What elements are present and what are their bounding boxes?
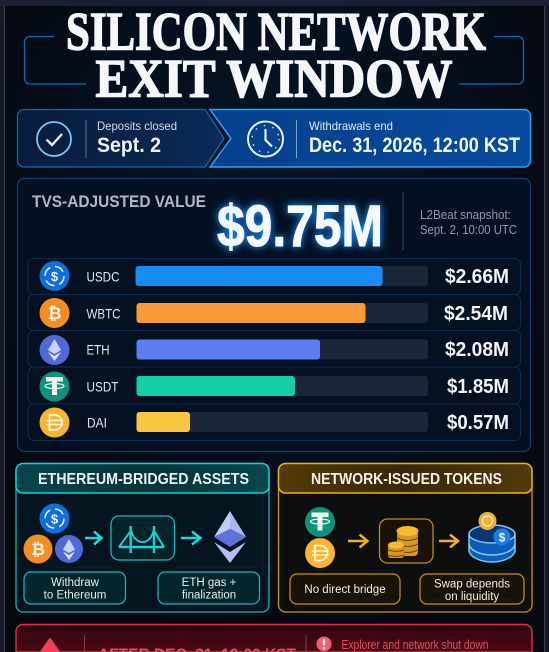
heading: Ethereum-bridged assets <box>16 464 269 493</box>
heading: network-issued tokens <box>278 464 532 493</box>
row: USDC <box>28 258 520 294</box>
big number: $9.75M <box>217 194 383 259</box>
row: ETH: ETH <box>86 342 110 358</box>
label: withdraw to Ethereum: Withdraw <box>51 577 100 589</box>
label: withdraw to Ethereum <box>24 572 126 604</box>
label: ETH gas + finalization: finalization <box>182 590 236 602</box>
icon: WBTC <box>40 298 70 328</box>
label: no direct bridge <box>290 574 400 604</box>
panel: network-issued tokens <box>278 464 532 612</box>
panel: after deadline warning <box>16 624 532 652</box>
label: swap depends on liquidity: Swap depends <box>434 578 510 590</box>
panel: Ethereum-bridged assets <box>16 464 269 612</box>
row: DAI <box>28 404 520 440</box>
title <box>66 2 486 108</box>
icon: alert circle <box>316 636 332 652</box>
label: swap depends on liquidity <box>420 574 524 604</box>
label: withdraw to Ethereum: to Ethereum <box>44 590 106 602</box>
icon: USDC coin: $ <box>51 512 59 526</box>
row: USDC: $2.66M <box>445 265 509 288</box>
row: ETH: $2.08M <box>445 338 509 361</box>
row: DAI: DAI <box>87 414 107 430</box>
text: snapshot note: L2Beat snapshot: <box>420 208 511 222</box>
title: EXIT WINDOW <box>96 48 452 108</box>
heading: network-issued tokens: NETWORK-ISSUED TOKENS <box>311 471 502 488</box>
row: WBTC <box>28 294 520 330</box>
icon: USDC coin <box>40 504 70 534</box>
icon: coin stacks <box>380 519 433 563</box>
arrow <box>348 534 368 548</box>
icon: clock <box>248 122 283 156</box>
icon: USDT coin <box>305 507 335 537</box>
arrow <box>439 534 458 548</box>
panel: withdrawals end <box>210 110 530 167</box>
text: deposits closed: Deposits closed <box>97 119 177 133</box>
icon: Ethereum diamond <box>214 511 246 563</box>
icon: check circle <box>37 122 71 156</box>
icon: ETH <box>40 335 70 365</box>
icon: liquidity pool: $ <box>499 530 506 544</box>
timeline banner <box>18 110 530 167</box>
text: snapshot note: Sept. 2, 10:00 UTC <box>420 223 517 237</box>
icon: WBTC: ₿ <box>48 304 62 323</box>
icon: BTC coin <box>24 534 52 564</box>
icon: liquidity pool <box>469 512 515 562</box>
row: USDC: USDC <box>86 268 120 284</box>
icon: USDT <box>40 372 70 402</box>
heading: Ethereum-bridged assets: ETHEREUM-BRIDGED ASSETS <box>38 471 249 488</box>
row: DAI: $0.57M <box>447 411 509 434</box>
title bracket decoration <box>24 36 524 84</box>
text: deadline: Dec. 31, 2026, 12:00 KST <box>309 134 520 157</box>
panel: TVS value <box>18 178 530 452</box>
icon: USDC: $ <box>51 269 59 284</box>
icon: BTC coin: ₿ <box>31 540 45 559</box>
row: USDT: USDT <box>86 378 119 394</box>
label: swap depends on liquidity: on liquidity <box>445 591 499 603</box>
icon: USDC <box>40 261 70 291</box>
label: ETH gas + finalization: ETH gas + <box>182 577 237 589</box>
icon: warning triangle <box>41 639 59 652</box>
icon: ETH coin <box>55 535 83 563</box>
icon: bridge <box>111 516 174 560</box>
label: ETH gas + finalization <box>158 572 260 604</box>
text: explorer shutdown: Explorer and network shut down <box>342 638 489 652</box>
row: USDT: $1.85M <box>447 375 509 398</box>
panel: deposits closed <box>18 110 224 167</box>
text: withdrawals end: Withdrawals end <box>309 119 393 133</box>
row: USDT <box>28 367 520 404</box>
row: WBTC: WBTC <box>86 306 120 322</box>
label: no direct bridge: No direct bridge <box>304 584 386 596</box>
icon: DAI coin <box>305 538 335 568</box>
row: ETH <box>28 330 520 367</box>
arrow <box>181 532 200 544</box>
row: WBTC: $2.54M <box>444 302 508 325</box>
text: sept 2: Sept. 2 <box>97 134 161 157</box>
arrow <box>85 532 102 544</box>
big number: $9.75M <box>217 194 383 259</box>
text: snapshot note <box>420 208 517 237</box>
icon: DAI <box>40 408 70 438</box>
heading: TVS-adjusted value: TVS-ADJUSTED VALUE <box>32 192 206 211</box>
